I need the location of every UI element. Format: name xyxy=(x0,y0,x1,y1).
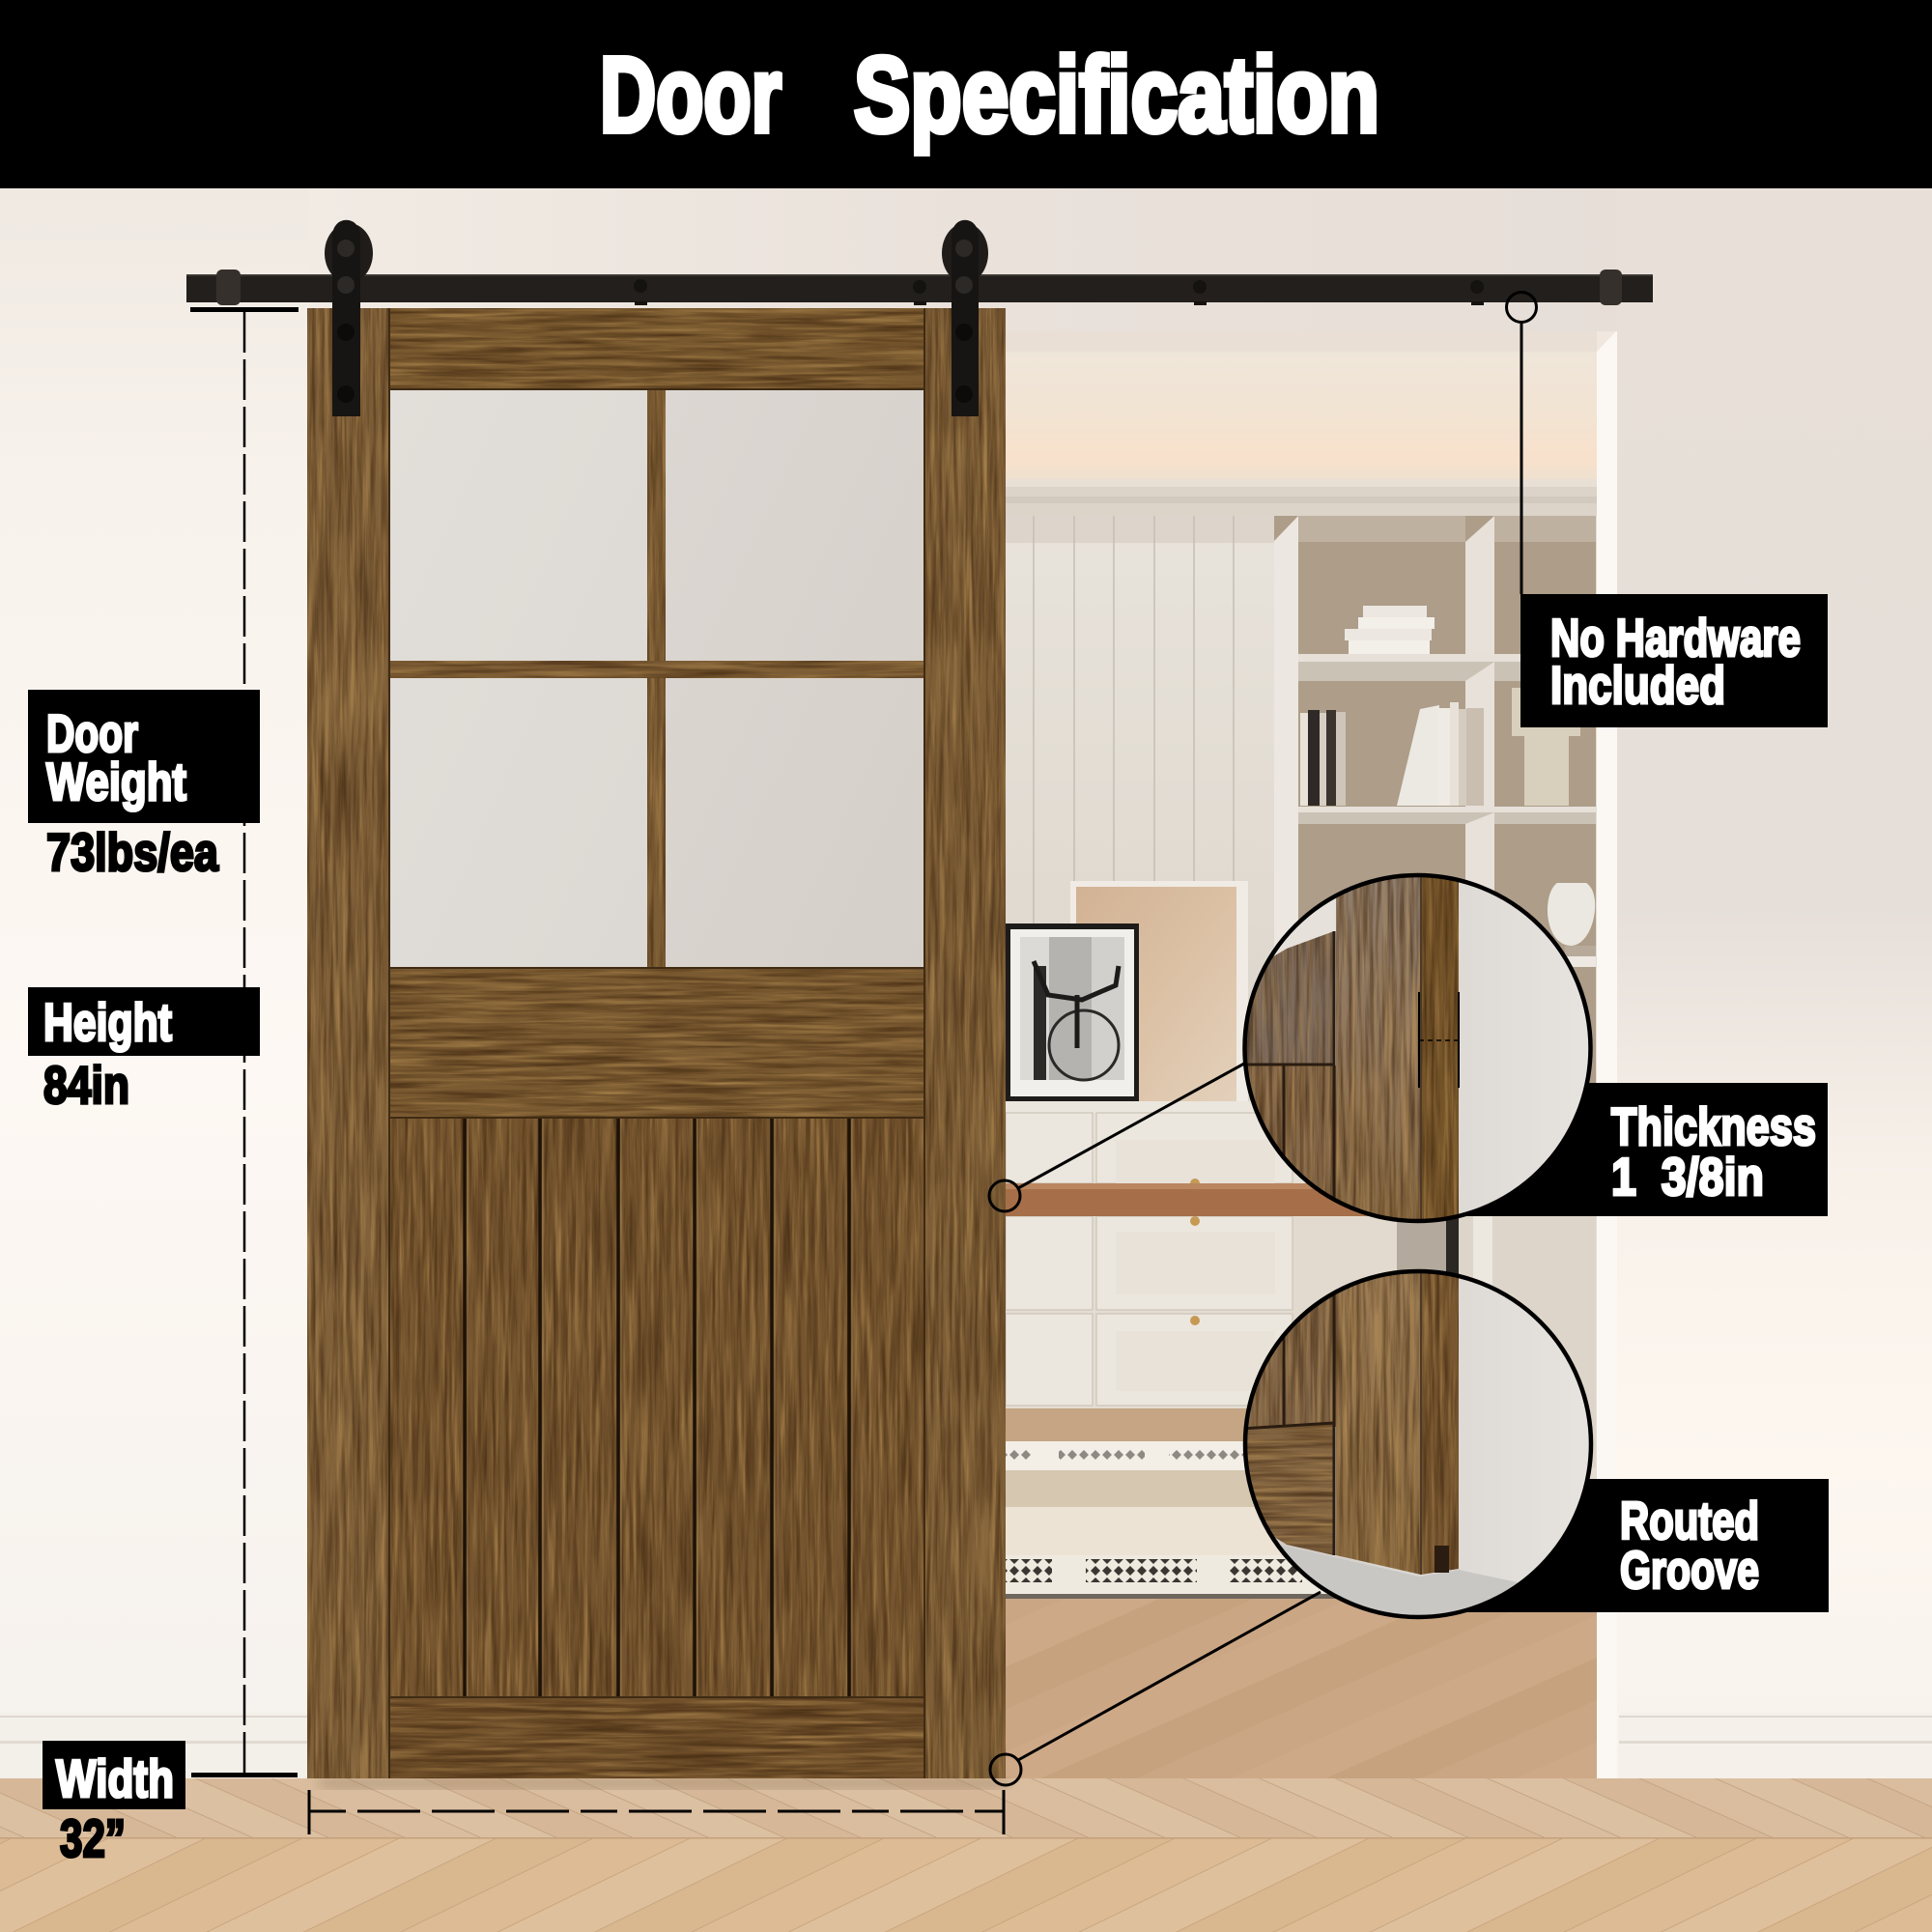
right hanger xyxy=(942,220,988,416)
callout: thickness: 1 3/8in xyxy=(1611,1147,1764,1207)
callout: no hardware included xyxy=(1507,292,1828,727)
floor xyxy=(0,1778,1932,1932)
left hanger xyxy=(325,220,373,416)
callout: routed groove: Groove xyxy=(1620,1540,1759,1600)
title banner xyxy=(0,0,1932,188)
callout: no hardware included: No Hardware xyxy=(1550,608,1801,668)
baseboards xyxy=(0,1713,1932,1778)
door drop shadow xyxy=(319,1778,1007,1788)
glass muntins xyxy=(389,389,924,969)
callout: no hardware included: Included xyxy=(1550,655,1725,715)
width dimension line xyxy=(307,1790,1005,1834)
barn door xyxy=(307,308,1007,1788)
callout: width xyxy=(43,1741,185,1868)
door stiles and rails xyxy=(307,308,1006,1778)
height dimension line xyxy=(190,307,298,1777)
door glass panes xyxy=(389,389,925,969)
beadboard wall panel xyxy=(1006,516,1274,1113)
bookshelf xyxy=(1274,516,1596,1115)
callout: routed groove: Routed xyxy=(1620,1491,1759,1550)
callout: height: Height xyxy=(43,992,172,1052)
callout: thickness: Thickness xyxy=(1611,1096,1816,1156)
interior room seen through doorway xyxy=(1006,331,1597,1778)
door jamb xyxy=(1597,331,1617,1778)
callout: door weight: 73lbs/ea xyxy=(46,822,218,882)
vertical planks xyxy=(389,1118,924,1697)
cabinet drawers and counter xyxy=(1006,1101,1596,1467)
framed artworks xyxy=(1006,881,1248,1101)
title banner: Specification xyxy=(854,36,1379,155)
callout: height: 84in xyxy=(43,1055,129,1115)
callout: width: Width xyxy=(56,1748,174,1808)
callout: height xyxy=(28,987,260,1115)
callout: door weight: Weight xyxy=(46,752,186,811)
callout: thickness xyxy=(989,1064,1828,1216)
callout: door weight: Door xyxy=(46,703,138,763)
callout: width: 32” xyxy=(60,1808,126,1868)
magnifier: routed groove detail xyxy=(1241,1267,1595,1621)
callout: door weight xyxy=(28,690,260,882)
sliding rail xyxy=(186,270,1653,305)
magnifier: door thickness detail xyxy=(1241,872,1595,1224)
books and decor on shelves xyxy=(1300,606,1596,967)
callout: routed groove xyxy=(990,1479,1829,1785)
title banner: Door xyxy=(600,36,781,155)
rug and floor in room xyxy=(1006,1408,1597,1778)
